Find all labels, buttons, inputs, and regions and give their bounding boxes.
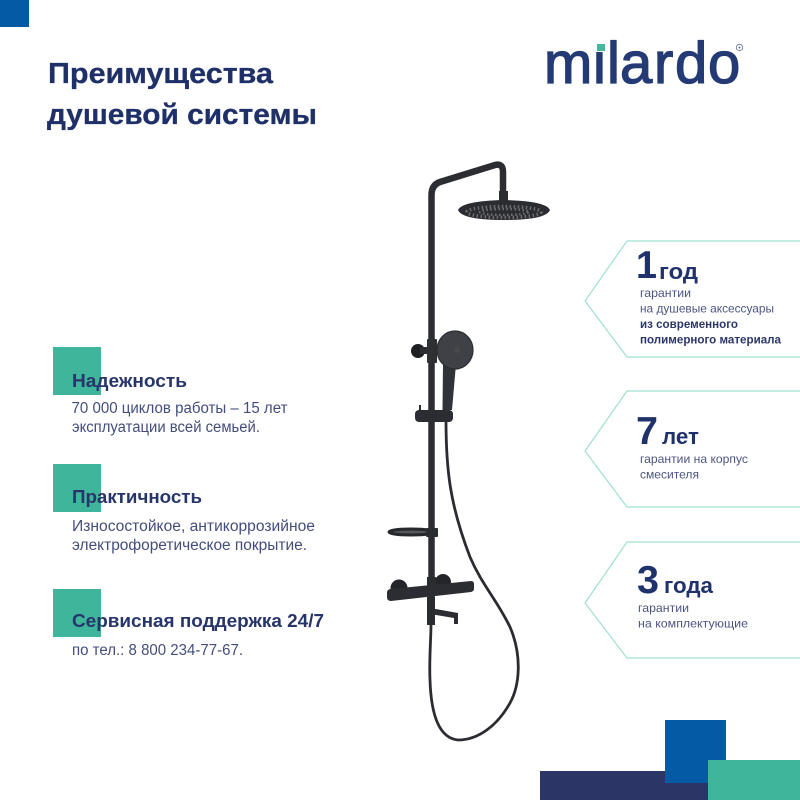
title: Преимущества (48, 58, 274, 90)
description: на комплектующие (638, 616, 748, 630)
description (640, 452, 748, 482)
logo: milardo: milardo (544, 31, 740, 96)
card outline (585, 241, 800, 357)
description: на душевые аксессуары (640, 302, 774, 316)
hand shower (437, 331, 473, 410)
riser pole and arm (432, 165, 503, 625)
card outline (585, 542, 800, 658)
warranty card: 1 year (585, 241, 800, 357)
benefit: reliability (53, 347, 288, 436)
big number (637, 559, 714, 602)
benefit: service support (53, 589, 324, 659)
warranty card: 3 years (585, 542, 800, 658)
text: practicality: электрофоретическое покрытие. (72, 537, 307, 554)
green square: service (53, 589, 101, 637)
description: гарантии на корпус (640, 452, 748, 466)
benefit: practicality (53, 464, 315, 554)
big number: лет (662, 424, 699, 449)
text: reliability (72, 400, 288, 436)
title (47, 58, 317, 131)
description (640, 286, 781, 346)
text: practicality: Износостойкое, антикоррозийное (72, 518, 315, 535)
text: practicality (72, 518, 315, 554)
hose (430, 420, 518, 740)
big number (636, 244, 698, 287)
big number: 7 (636, 410, 658, 453)
description: полимерного материала (640, 332, 781, 346)
corner blocks (540, 720, 800, 800)
heading: reliability: Надежность (72, 371, 187, 391)
heading: service: Сервисная поддержка 24/7 (72, 611, 324, 631)
text: service: по тел.: 8 800 234-77-67. (72, 642, 243, 659)
big number (636, 410, 699, 453)
green square: reliability (53, 347, 101, 395)
description: смесителя (640, 468, 699, 482)
heading: practicality: Практичность (72, 487, 202, 507)
slider clamp (415, 405, 453, 422)
rain shower head (458, 191, 550, 220)
description: гарантии (640, 286, 691, 300)
text: reliability: эксплуатации всей семьей. (72, 419, 260, 436)
wall knob (411, 339, 437, 363)
warranty card: 7 years (585, 391, 800, 507)
soap dish (389, 528, 438, 537)
card outline (585, 391, 800, 507)
green square: practicality (53, 464, 101, 512)
big number: 3 (637, 559, 659, 602)
description (638, 601, 748, 630)
thermostat mixer (387, 574, 474, 625)
big number: года (664, 573, 714, 598)
big number: год (659, 259, 698, 284)
big number: 1 (636, 244, 657, 287)
description: из современного (640, 317, 738, 331)
title: душевой системы (47, 99, 317, 131)
description: гарантии (638, 601, 689, 615)
text: reliability: 70 000 циклов работы – 15 лет (72, 400, 288, 417)
shower system illustration (387, 165, 550, 740)
corner square (0, 0, 29, 27)
